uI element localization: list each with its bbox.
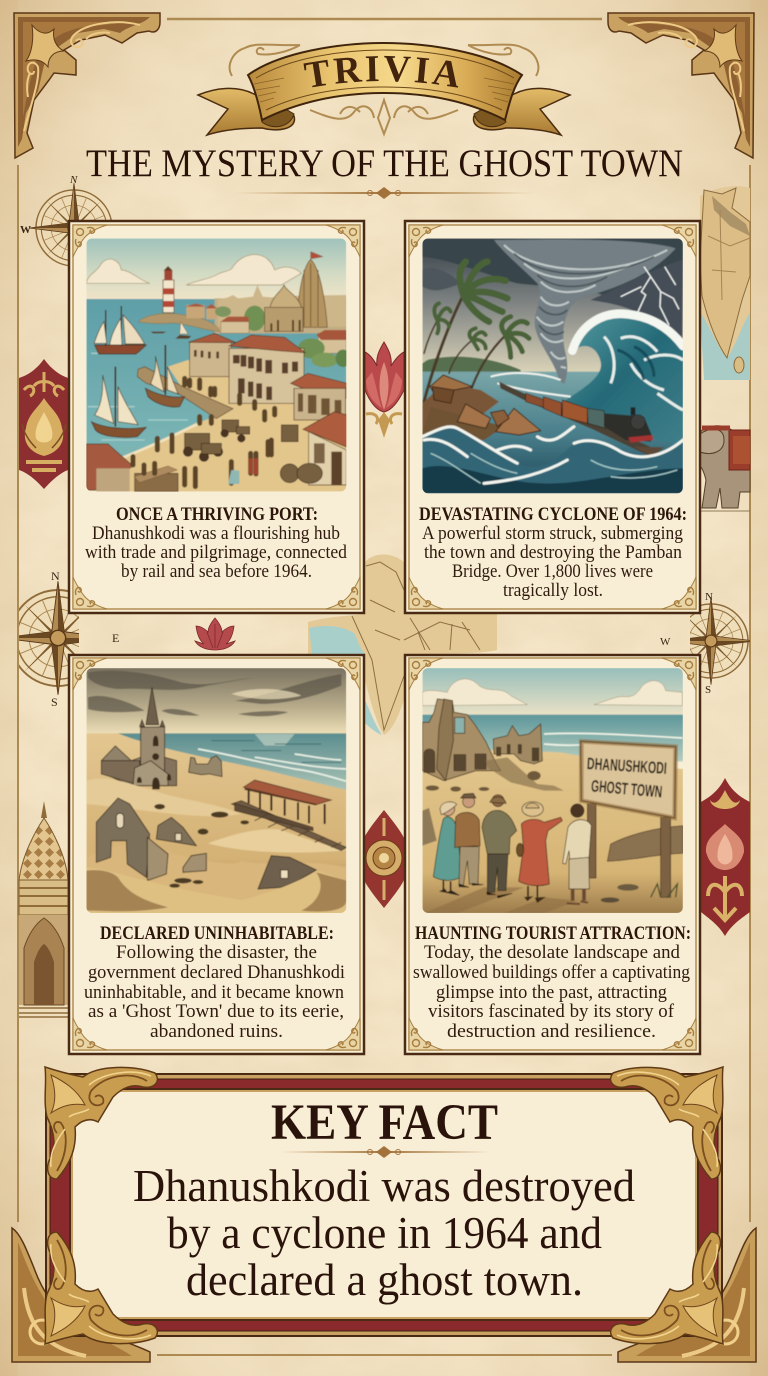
body: uninhabitable: Following the disaster, the [116, 943, 317, 963]
panel: tourist attraction [405, 655, 700, 1054]
compass: top left: W [20, 224, 31, 236]
key fact heading: KEY FACT [271, 1095, 498, 1151]
panel: cyclone [405, 221, 700, 613]
wrecked houses [422, 383, 499, 433]
mughal dome illustration [19, 801, 68, 1017]
temple [265, 252, 327, 331]
townspeople [133, 378, 275, 487]
heading: uninhabitable: DECLARED UNINHABITABLE: [100, 923, 334, 944]
train [499, 382, 657, 457]
body: tourist: swallowed buildings offer a captivating [413, 963, 690, 983]
body: tourist: visitors fascinated by its story of [428, 1002, 675, 1022]
corner ornament: top right [608, 13, 754, 158]
body: uninhabitable: uninhabitable, and it became known [84, 983, 344, 1003]
arched ribbon [248, 43, 522, 120]
lotus emblem between cards [365, 342, 404, 438]
compass: mid left [19, 572, 119, 706]
compass: top left: N [69, 174, 78, 186]
sand quay [121, 360, 346, 492]
ribbon banner [196, 42, 572, 137]
foreground waves [422, 427, 683, 493]
panel: uninhabitable [69, 655, 364, 1054]
sign board: DHANUSHKODI [586, 754, 667, 778]
illustration: harbour town [86, 238, 350, 492]
man in brown jacket [455, 812, 480, 847]
body: tourist [413, 943, 690, 1042]
body: uninhabitable: government declared Dhanushkodi [88, 963, 345, 983]
body: uninhabitable [84, 943, 345, 1042]
funnel [494, 240, 676, 384]
heading: tourist: HAUNTING TOURIST ATTRACTION: [415, 923, 691, 944]
key fact statement [133, 1161, 635, 1305]
right tail [474, 88, 570, 135]
body: port: by rail and sea before 1964. [121, 562, 312, 582]
banner title: TRIVIA [304, 56, 458, 88]
elephant [700, 426, 750, 511]
foreground sand [86, 867, 346, 913]
compass: mid right: W [660, 636, 671, 648]
main title: THE MYSTERY OF THE GHOST TOWN [86, 142, 683, 185]
body: port [85, 524, 348, 582]
main buildings [190, 342, 231, 377]
corner wedge: bottom right [618, 1228, 756, 1362]
key fact statement: Dhanushkodi was destroyed [133, 1161, 635, 1211]
red panel with lotus: right [701, 778, 750, 936]
heading: cyclone: DEVASTATING CYCLONE OF 1964: [419, 504, 687, 525]
compass: mid left: S [51, 695, 58, 709]
railway platform [231, 780, 346, 851]
lighthouse [163, 266, 174, 313]
heading: port: ONCE A THRIVING PORT: [116, 504, 318, 525]
compass: mid right: N [705, 591, 713, 603]
corner wedge: bottom left [12, 1228, 150, 1362]
body: cyclone [422, 524, 683, 601]
compass: mid right [660, 591, 755, 696]
palms [424, 295, 506, 402]
central map of India [308, 554, 497, 735]
compass: mid left: E [112, 631, 119, 645]
corner ornament: top left [14, 13, 160, 158]
wreck at right [607, 826, 683, 861]
body: port: with trade and pilgrimage, connected [85, 543, 348, 563]
key fact statement: by a cyclone in 1964 and [167, 1208, 602, 1258]
church [101, 687, 177, 789]
map of India: right edge [700, 186, 750, 380]
flourishes around banner [230, 45, 538, 134]
body: uninhabitable: abandoned ruins. [150, 1022, 283, 1042]
dunes [86, 778, 241, 816]
compass: mid right: S [705, 684, 711, 696]
tourists [424, 793, 591, 913]
body: cyclone: A powerful storm struck, submerging [422, 524, 683, 544]
carts and cargo [183, 420, 322, 483]
large ruin [96, 798, 316, 889]
body: uninhabitable: as a 'Ghost Town' due to its eerie, [88, 1002, 344, 1022]
woman in teal dress [433, 817, 461, 880]
ruined buildings [422, 699, 542, 781]
illustration: tourists at the sign [422, 668, 683, 913]
medallion between lower cards [364, 810, 404, 908]
body: cyclone: Bridge. Over 1,800 lives were [452, 562, 653, 582]
body: tourist: glimpse into the past, attracting [436, 983, 667, 1003]
body: cyclone: tragically lost. [503, 581, 603, 601]
lightning [621, 267, 679, 325]
left tail [198, 88, 294, 135]
sign board [581, 741, 676, 818]
sign board: GHOST TOWN [590, 776, 663, 802]
body: port: Dhanushkodi was a flourishing hub [92, 524, 340, 544]
man in grey suit [482, 810, 517, 854]
body: tourist: destruction and resilience. [447, 1022, 656, 1042]
big wave [562, 318, 683, 440]
illustration: cyclone and train [422, 238, 683, 493]
illustration: church ruins in sand [86, 668, 346, 913]
body: tourist: Today, the desolate landscape and [424, 943, 681, 963]
key fact divider [280, 1146, 490, 1158]
title divider [235, 187, 533, 199]
body: cyclone: the town and destroying the Pamban [424, 543, 682, 563]
local man [563, 820, 591, 864]
scroll corners [45, 1067, 723, 1344]
red panel with gold lotus: left [19, 359, 68, 489]
harbour ships [94, 306, 146, 354]
sign posts [587, 804, 596, 878]
small lotus [195, 618, 235, 650]
panel: thriving port [69, 221, 364, 613]
compass: mid left: N [51, 569, 60, 583]
locomotive [604, 407, 653, 443]
key fact statement: declared a ghost town. [186, 1255, 583, 1305]
woman in red dress [519, 817, 562, 886]
panel: key fact [45, 1067, 723, 1344]
compass: top left [20, 174, 119, 273]
